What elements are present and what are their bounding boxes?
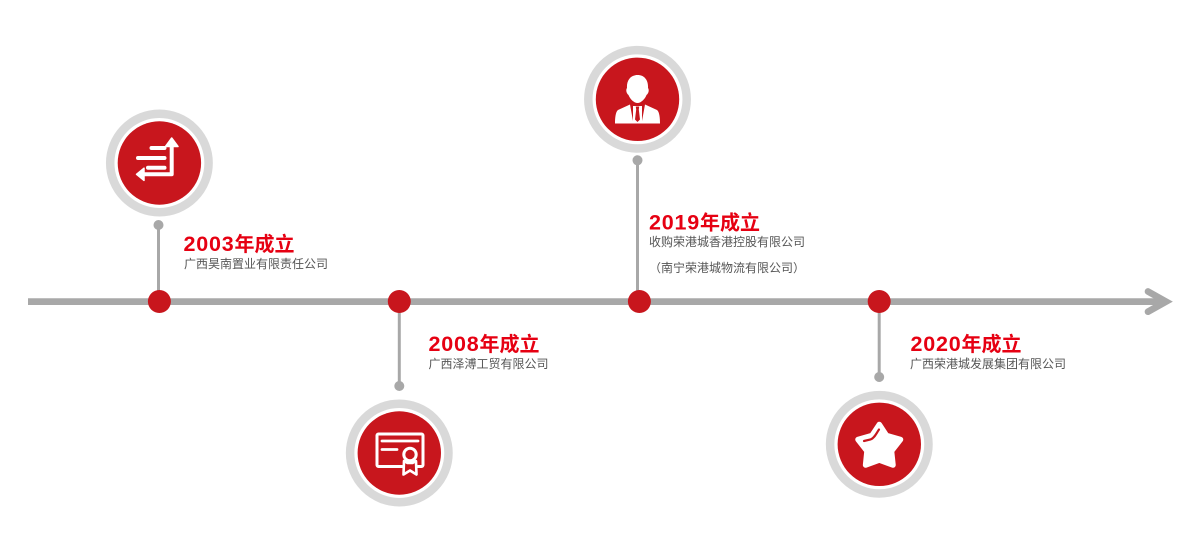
milestone 2008: [350, 290, 549, 502]
connector 2019: [632, 155, 642, 301]
connector 2003: [154, 220, 164, 301]
milestone 2019: [588, 50, 805, 313]
connector 2020: [874, 302, 884, 382]
icon: person: [588, 50, 687, 148]
heading 2003: 2003年成立: [184, 232, 295, 256]
text 2019 line 1: 收购荣港城香港控股有限公司: [649, 234, 805, 249]
text 2020: 广西荣港城发展集团有限公司: [910, 356, 1066, 371]
icon: star: [830, 395, 928, 493]
heading 2008: 2008年成立: [428, 332, 540, 356]
icon: list with arrows: [110, 114, 209, 212]
text 2003: 广西昊南置业有限责任公司: [184, 256, 328, 271]
milestone 2020: [830, 290, 1066, 493]
timeline dot 2008: [388, 290, 411, 313]
timeline dot 2020: [868, 290, 891, 313]
timeline arrow: [28, 292, 1166, 312]
heading 2020: 2020年成立: [910, 332, 1022, 356]
heading 2019: 2019年成立: [649, 210, 760, 234]
icon: certificate: [350, 404, 448, 502]
connector 2008: [394, 302, 404, 391]
text 2008: 广西泽溥工贸有限公司: [428, 356, 549, 371]
timeline dot 2003: [148, 290, 171, 313]
text 2019 line 2: （南宁荣港城物流有限公司）: [649, 260, 805, 275]
milestone 2003: [110, 114, 328, 313]
timeline dot 2019: [628, 290, 651, 313]
